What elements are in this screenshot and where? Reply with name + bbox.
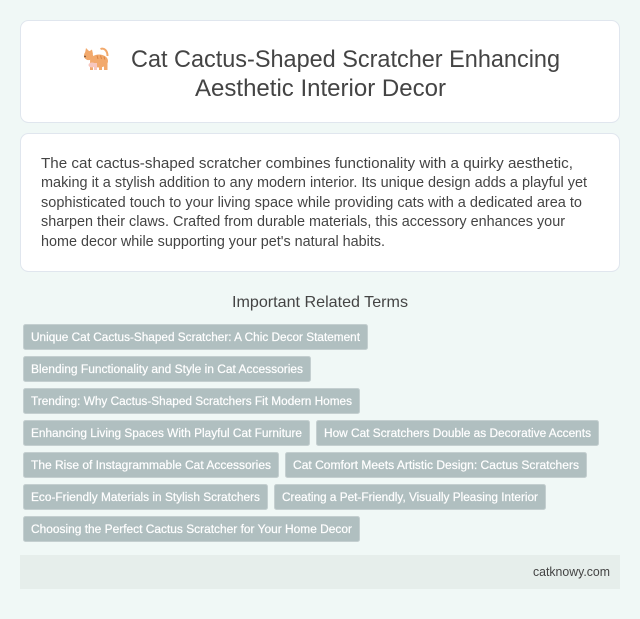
title bbox=[131, 46, 560, 102]
related term tags bbox=[24, 324, 598, 542]
tag 10: Choosing the Perfect Cactus Scratcher for Your Home Decor bbox=[31, 522, 352, 536]
tag 8 bbox=[24, 484, 268, 510]
panel: description bbox=[20, 134, 620, 272]
tag 5 bbox=[316, 420, 598, 446]
tag 6 bbox=[24, 452, 278, 478]
tag 10 bbox=[24, 516, 360, 542]
tag 6: The Rise of Instagrammable Cat Accessories bbox=[31, 458, 271, 472]
tag 2 bbox=[24, 356, 310, 382]
tag 7: Cat Comfort Meets Artistic Design: Cactus Scratchers bbox=[293, 458, 579, 472]
title: Aesthetic Interior Decor bbox=[195, 75, 446, 102]
footer site name: catknowy.com bbox=[533, 565, 610, 579]
description text: sophisticated touch to your living space while providing cats with a dedicated area to bbox=[41, 194, 582, 211]
heading: related terms: Important Related Terms bbox=[232, 294, 408, 311]
tag 5: How Cat Scratchers Double as Decorative Accents bbox=[324, 426, 591, 440]
tag 3 bbox=[24, 388, 360, 414]
tag 8: Eco-Friendly Materials in Stylish Scratchers bbox=[31, 490, 260, 504]
tag 2: Blending Functionality and Style in Cat Accessories bbox=[31, 362, 303, 376]
footer bbox=[20, 555, 620, 589]
description text: sharpen their claws. Crafted from durable materials, this accessory enhances your bbox=[41, 213, 565, 230]
tag 3: Trending: Why Cactus-Shaped Scratchers Fit Modern Homes bbox=[31, 394, 352, 408]
tag 4 bbox=[24, 420, 310, 446]
tag 1 bbox=[24, 324, 368, 350]
tag 7 bbox=[286, 452, 586, 478]
description text: home decor while supporting your pet's natural habits. bbox=[41, 233, 385, 250]
tag 4: Enhancing Living Spaces With Playful Cat Furniture bbox=[31, 426, 302, 440]
tag 9: Creating a Pet-Friendly, Visually Pleasing Interior bbox=[282, 490, 538, 504]
tag 1: Unique Cat Cactus-Shaped Scratcher: A Chic Decor Statement bbox=[31, 330, 361, 344]
description text: making it a stylish addition to any modern interior. Its unique design adds a playful yet bbox=[41, 174, 588, 191]
title: Cat Cactus-Shaped Scratcher Enhancing bbox=[131, 46, 560, 73]
header panel bbox=[20, 20, 620, 122]
description text: The cat cactus-shaped scratcher combines functionality with a quirky aesthetic, bbox=[41, 155, 573, 172]
description text bbox=[41, 155, 588, 250]
tag 9 bbox=[274, 484, 546, 510]
icon: cat bbox=[84, 48, 108, 70]
